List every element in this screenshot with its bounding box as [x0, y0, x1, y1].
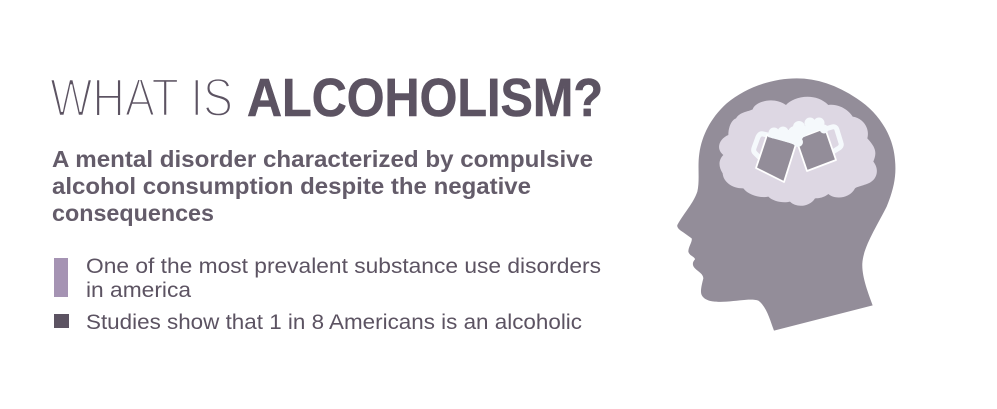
icon: head silhouette with beer mugs in brain [677, 78, 895, 331]
foam [768, 118, 828, 147]
right mug handle [822, 127, 841, 153]
bullet text: prevalence [86, 255, 601, 302]
bullet: prevalent disorder [54, 255, 601, 302]
title [50, 68, 603, 128]
title: bold part: ALCOHOLISM? [247, 68, 603, 128]
definition text: A mental disorder characterized by compulsive [52, 146, 593, 172]
beer mugs [754, 118, 841, 182]
left mug [756, 135, 796, 182]
definition text [52, 146, 593, 226]
bullet text: prevalence: in america [86, 279, 191, 302]
bullet marker: tall purple bar [54, 258, 68, 297]
brain cloud [719, 97, 877, 206]
head silhouette [677, 78, 895, 331]
title: thin part: WHAT IS [50, 68, 233, 128]
bullet: 1 in 8 [54, 311, 582, 334]
bullet marker: dark square [54, 314, 69, 328]
bullet text: prevalence: One of the most prevalent substance use disorders [86, 255, 601, 278]
bullet text: statistic: Studies show that 1 in 8 Americans is an alcoholic [86, 311, 582, 334]
definition text: alcohol consumption despite the negative [52, 173, 531, 199]
left mug handle [754, 134, 772, 160]
definition text: consequences [52, 200, 214, 226]
right mug [796, 128, 836, 171]
